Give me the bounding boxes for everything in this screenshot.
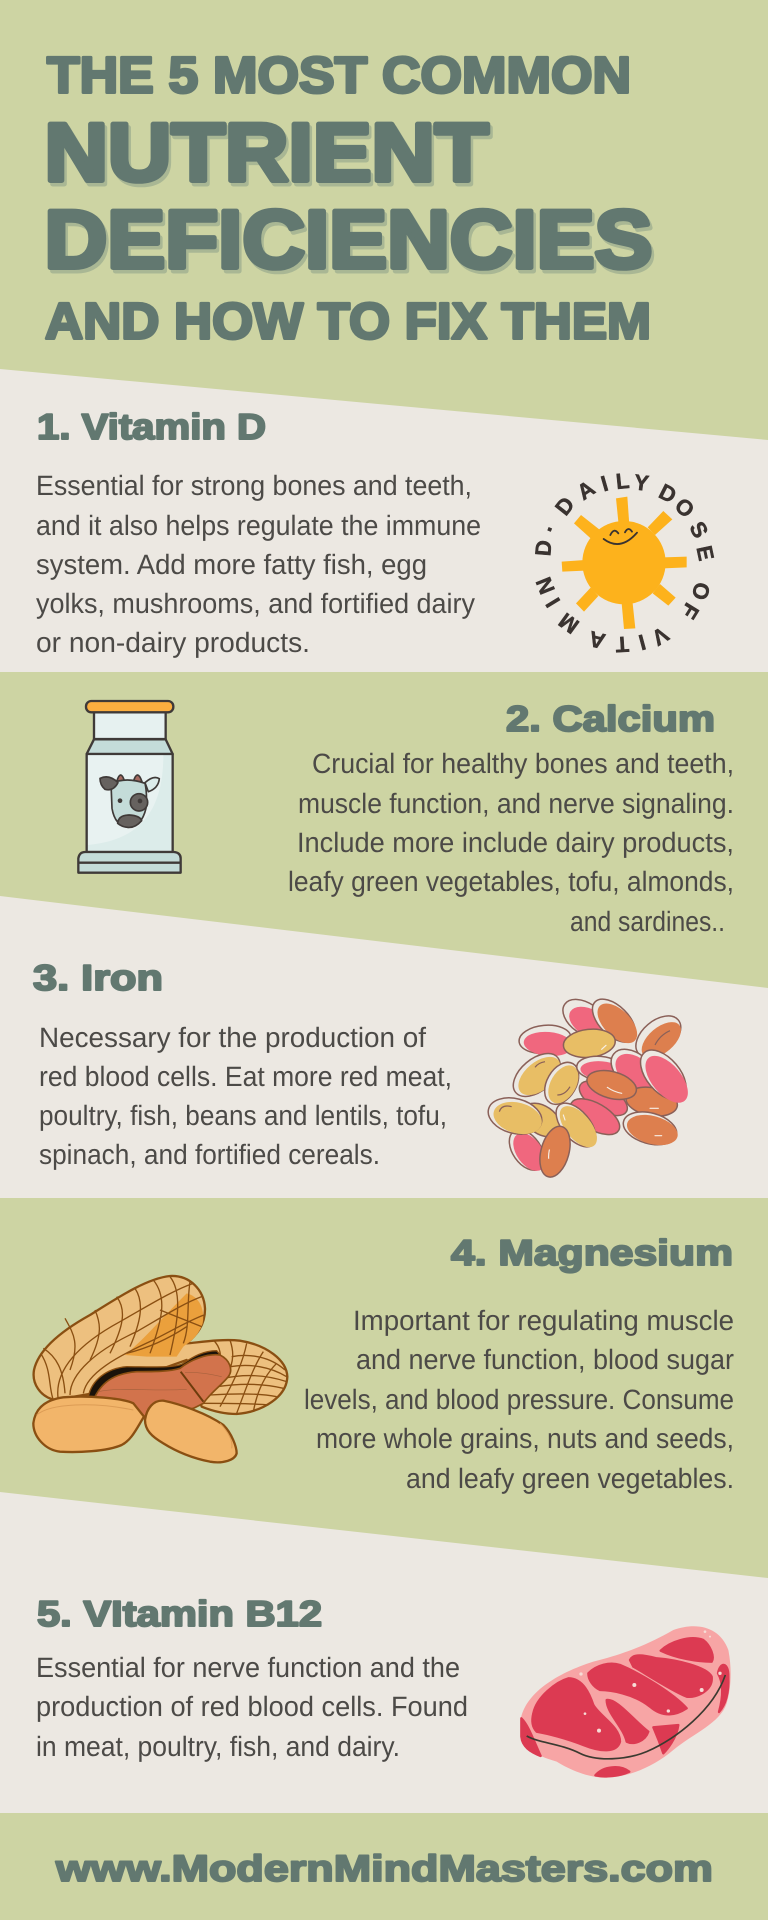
body text: calcium: leafy green vegetables, tofu, almonds,	[288, 866, 734, 897]
body text: vitamin d: and it also helps regulate the immune	[36, 510, 481, 541]
title block	[44, 46, 655, 350]
body text: vitamin d: yolks, mushrooms, and fortified dairy	[36, 588, 475, 619]
icon: steak	[521, 1626, 731, 1778]
panel: iron	[0, 896, 768, 1198]
heading: vitamin b12: 5. VItamin B12	[37, 1593, 322, 1634]
body text: iron: Necessary for the production of	[39, 1022, 426, 1053]
body text: iron: red blood cells. Eat more red meat,	[39, 1061, 452, 1092]
body text: calcium: muscle function, and nerve signaling.	[298, 788, 734, 819]
body text: magnesium: levels, and blood pressure. Consume	[304, 1384, 734, 1415]
body text: vitamin d: or non-dairy products.	[36, 627, 310, 658]
title line: nutrient: NUTRIENT	[47, 111, 491, 202]
title line: deficiencies: DEFICIENCIES	[44, 194, 652, 286]
body text: calcium: Crucial for healthy bones and teeth,	[312, 748, 734, 779]
body text: magnesium: and nerve function, blood sugar	[356, 1344, 734, 1375]
title line: the 5 most common: THE 5 MOST COMMON	[47, 46, 631, 104]
body text: iron: poultry, fish, beans and lentils, tofu,	[39, 1100, 447, 1131]
body text: magnesium: and leafy green vegetables.	[406, 1463, 734, 1494]
body text: vitamin b12	[36, 1652, 468, 1762]
body text: vitamin d: Essential for strong bones and teeth,	[36, 470, 472, 501]
heading: iron: 3. Iron	[33, 957, 163, 998]
cow face	[100, 775, 159, 827]
badge text: DAILY DOSE OF VITAMIN D ·	[530, 468, 719, 657]
panel: magnesium	[33, 1232, 734, 1494]
heading: vitamin d: 1. Vitamin D	[37, 406, 266, 447]
title line: and how to fix them: AND HOW TO FIX THEM	[45, 292, 651, 350]
heading: magnesium: 4. Magnesium	[451, 1232, 733, 1273]
icon: peanuts	[33, 1276, 287, 1462]
body text: calcium: Include more include dairy products,	[297, 827, 734, 858]
body text: vitamin d	[36, 470, 481, 658]
body text: magnesium: more whole grains, nuts and seeds,	[316, 1423, 734, 1454]
body text: calcium	[288, 748, 734, 937]
panel: vitamin d	[0, 369, 768, 672]
title line: deficiencies: DEFICIENCIES	[47, 198, 655, 289]
body text: iron	[39, 1022, 452, 1170]
heading: calcium: 2. Calcium	[506, 698, 715, 739]
body text: vitamin d: system. Add more fatty fish, egg	[36, 549, 427, 580]
icon: milk bottle with cow	[78, 701, 181, 873]
body text: iron: spinach, and fortified cereals.	[39, 1139, 380, 1170]
icon: pile of beans	[484, 991, 696, 1180]
icon: smiling sun badge	[530, 468, 719, 657]
body text: magnesium: Important for regulating muscle	[353, 1305, 734, 1336]
body text: vitamin b12: in meat, poultry, fish, and dairy.	[36, 1731, 400, 1762]
footer website url: www.ModernMindMasters.com	[55, 1848, 713, 1889]
panel: calcium	[78, 698, 734, 937]
body text: vitamin b12: production of red blood cells. Found	[36, 1691, 468, 1722]
body text: magnesium	[304, 1305, 734, 1494]
body text: vitamin b12: Essential for nerve function and the	[36, 1652, 460, 1683]
body text: calcium: and sardines..	[570, 906, 725, 937]
title line: nutrient: NUTRIENT	[44, 108, 489, 198]
panel: vitamin b12	[0, 1492, 768, 1813]
